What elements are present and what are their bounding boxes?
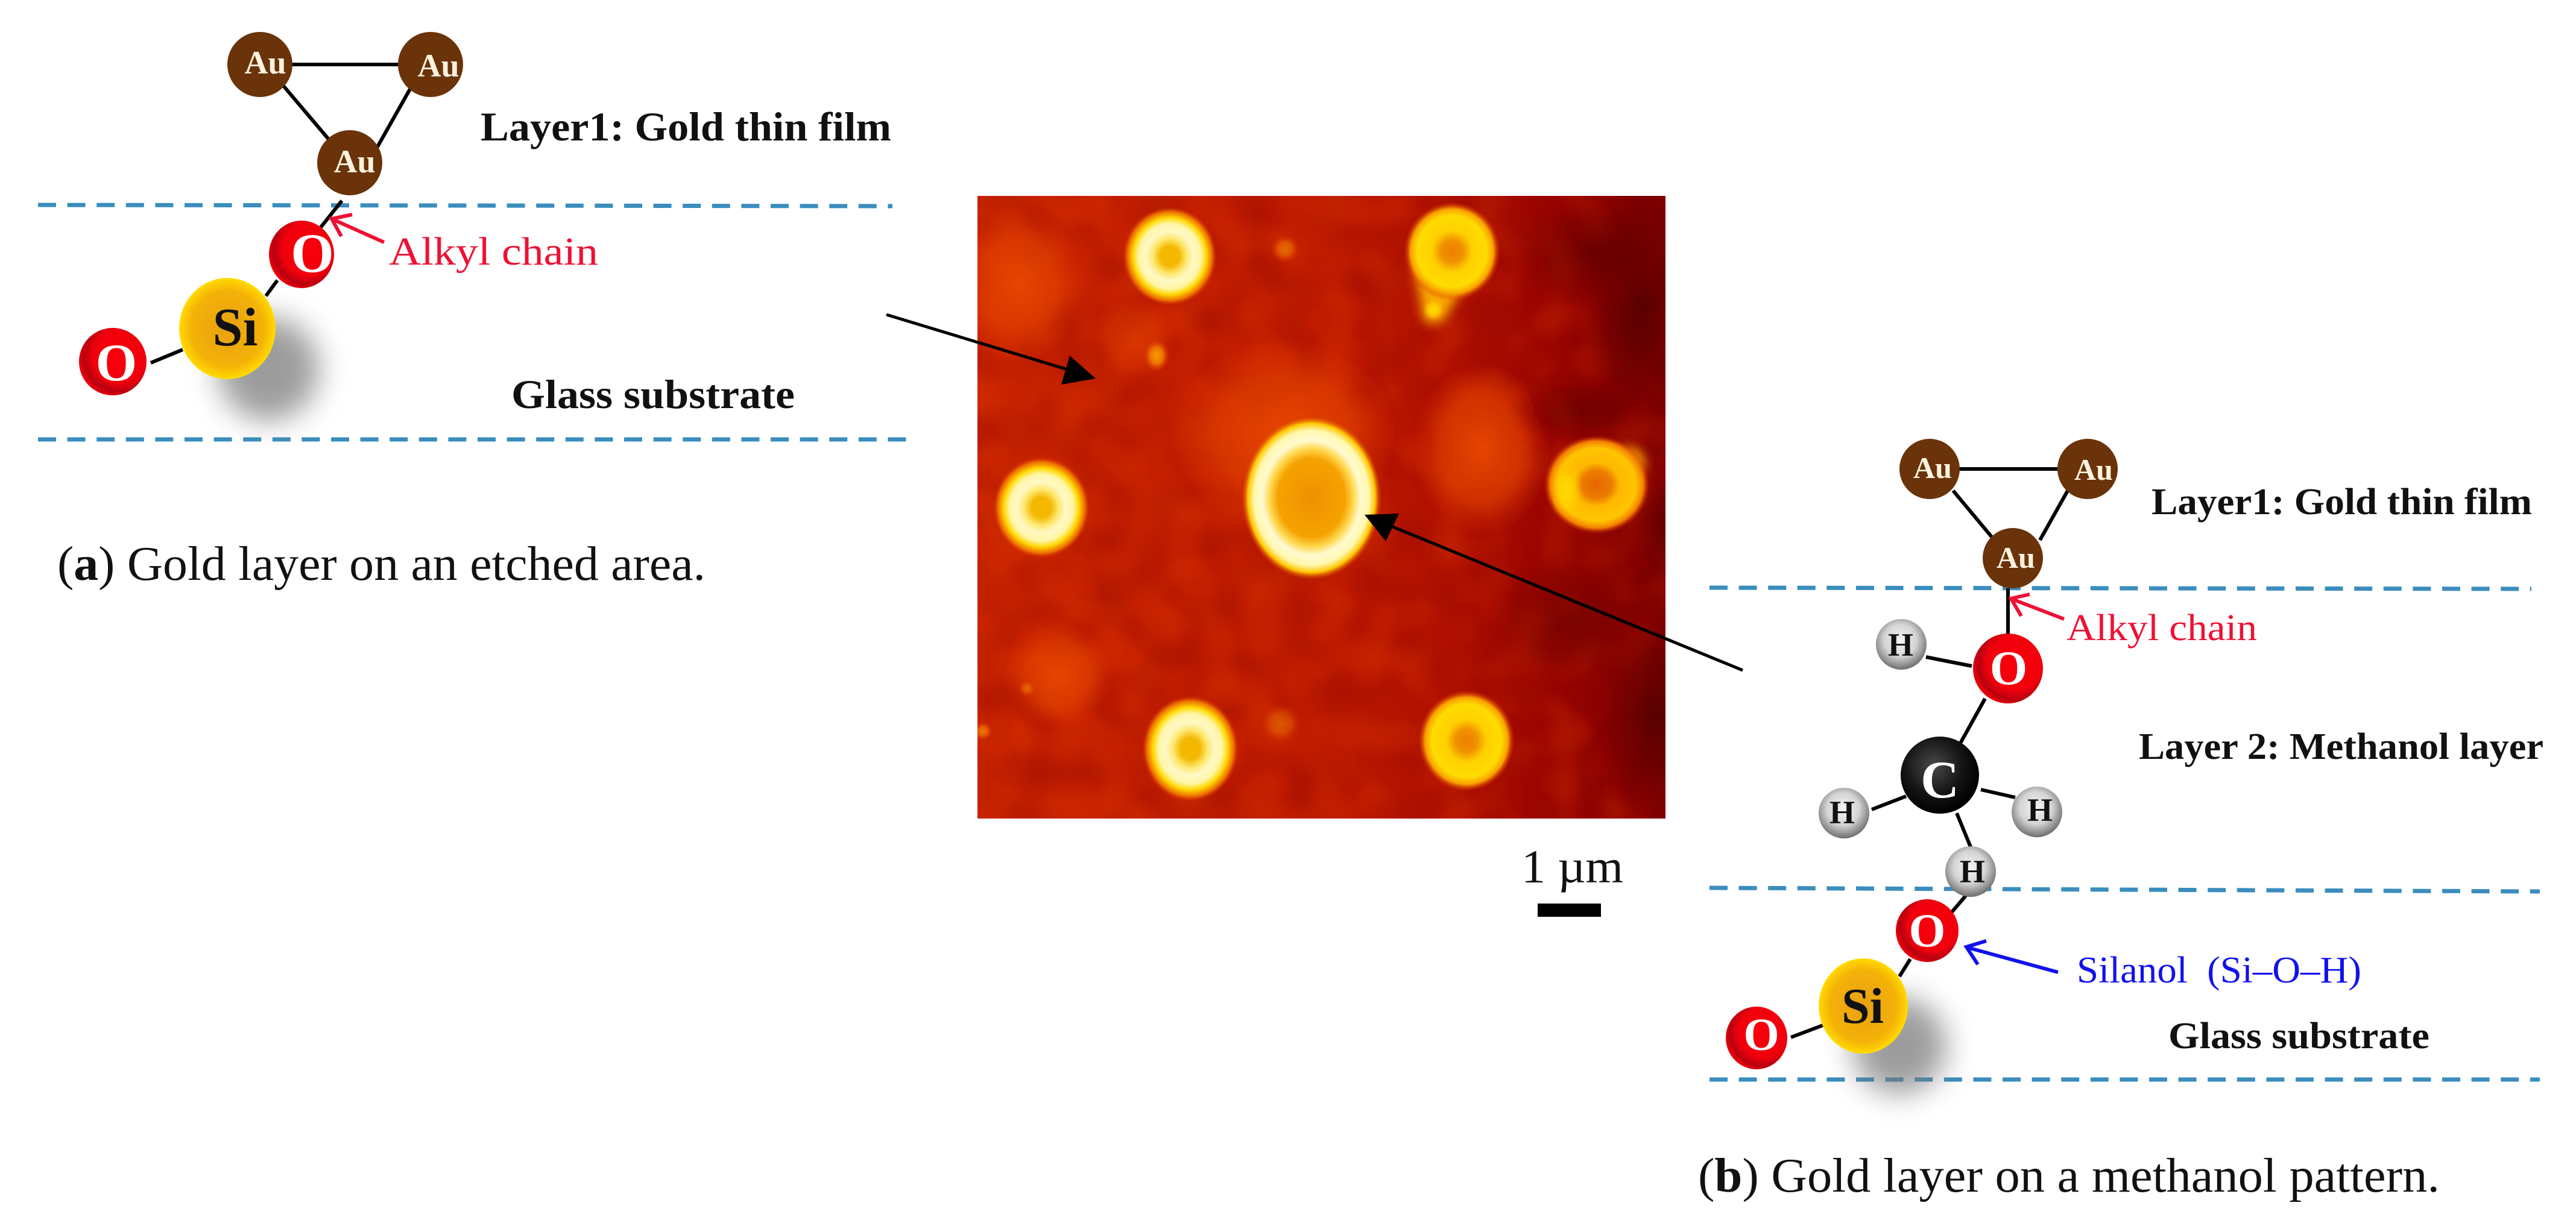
molecule: gold atoms triangle (a)	[227, 32, 463, 195]
panel: fluorescence micrograph	[977, 196, 1665, 819]
label: layer 2 methanol layer: Layer 2: Methanol layer	[2139, 726, 2543, 767]
arrow: from panel (b) to central ring	[1365, 514, 1743, 670]
scale bar: 1 µm	[1521, 840, 1623, 893]
molecule: gold atoms triangle (b)	[1899, 439, 2118, 588]
caption (b): (b) Gold layer on a methanol pattern.	[1698, 1149, 2440, 1202]
label: layer 1 gold thin film (b): Layer1: Gold thin film	[2151, 482, 2532, 523]
molecule: methanol (b): H	[1960, 853, 1985, 890]
micrograph background glows and dark zones	[977, 198, 1665, 796]
molecule: gold atoms triangle (a): Au	[244, 45, 286, 81]
layer boundary dashed lines (a)	[38, 205, 908, 439]
molecule: methanol (b): H	[1888, 627, 1913, 663]
arrow: from panel (a) to etched area	[886, 315, 1096, 385]
molecule: gold atoms triangle (b): Au	[1913, 451, 1952, 485]
molecule: silanol and silicon oxide (b)	[1726, 899, 1959, 1094]
molecule: methanol (b): C	[1921, 751, 1959, 809]
molecule: gold atoms triangle (a): Au	[333, 143, 376, 180]
label: glass substrate (b): Glass substrate	[2168, 1016, 2429, 1057]
molecule: methanol (b)	[1819, 588, 2062, 912]
molecule: silicon oxide with alkyl chain bond (a)	[79, 201, 342, 421]
molecule: silicon oxide with alkyl chain bond (a): O	[96, 334, 137, 392]
molecule: silanol and silicon oxide (b): Si	[1842, 978, 1884, 1034]
label: alkyl chain (b): Alkyl chain	[2066, 608, 2257, 649]
label: layer 1 gold thin film (a): Layer1: Gold thin film	[481, 104, 891, 149]
red arrow: alkyl chain (a)	[332, 215, 384, 242]
molecule: methanol (b): H	[2027, 792, 2053, 828]
molecule: methanol (b): O	[1990, 642, 2027, 695]
micrograph small bright spots	[973, 234, 1301, 744]
molecule: gold atoms triangle (a): Au	[417, 48, 459, 84]
red arrow: alkyl chain (b)	[2011, 594, 2064, 619]
panel: (b) gold layer on a methanol pattern	[1698, 439, 2543, 1202]
molecule: silicon oxide with alkyl chain bond (a): O	[291, 222, 334, 284]
panel: (a) gold layer on an etched area	[38, 32, 908, 591]
micrograph ring features	[993, 202, 1650, 802]
molecule: silanol and silicon oxide (b): O	[1909, 904, 1945, 957]
scale bar	[1521, 840, 1623, 917]
layer boundary dashed lines (b)	[1709, 588, 2540, 1080]
label: alkyl chain (a): Alkyl chain	[389, 230, 598, 274]
molecule: silicon oxide with alkyl chain bond (a): Si	[212, 298, 258, 357]
label: glass substrate (a): Glass substrate	[511, 371, 795, 417]
caption (a): (a) Gold layer on an etched area.	[57, 538, 706, 591]
molecule: gold atoms triangle (b): Au	[1997, 541, 2035, 574]
molecule: methanol (b): H	[1829, 794, 1855, 831]
label: silanol: Silanol (Si–O–H)	[2077, 950, 2361, 991]
blue arrow: silanol	[1966, 941, 2058, 972]
molecule: silanol and silicon oxide (b): O	[1743, 1010, 1779, 1060]
molecule: gold atoms triangle (b): Au	[2074, 453, 2113, 486]
